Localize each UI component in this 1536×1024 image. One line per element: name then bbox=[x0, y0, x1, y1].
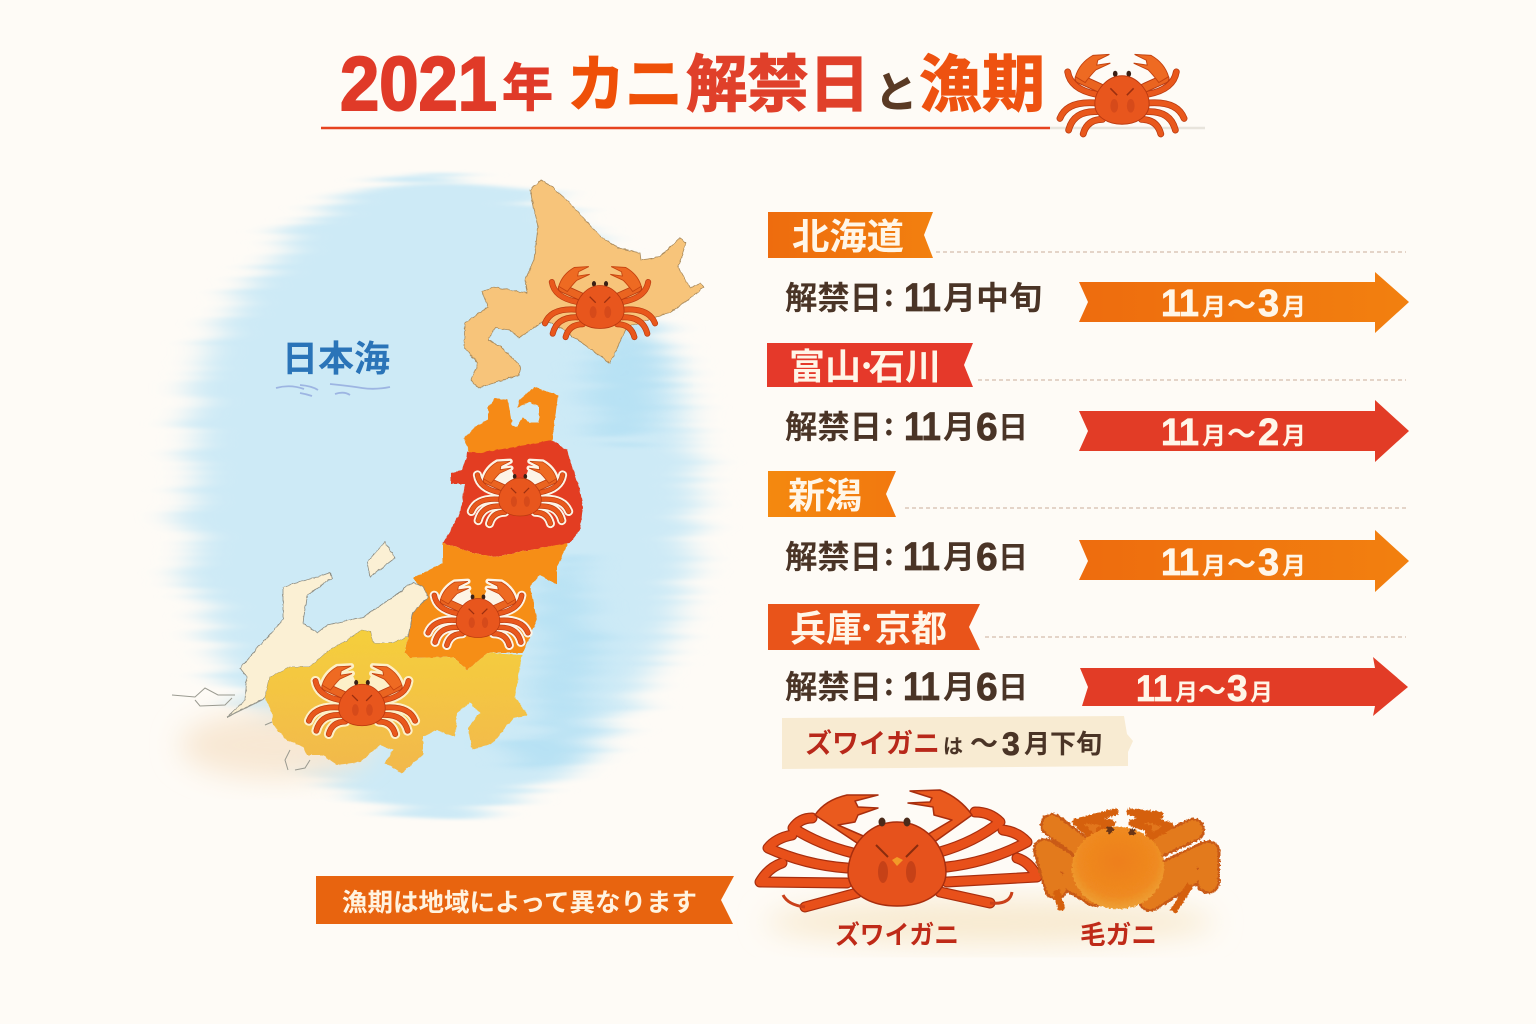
season arrow: 11 bbox=[1136, 668, 1172, 709]
opening date: 解禁日 bbox=[785, 273, 882, 319]
panel: Toyama Ishikawa row bbox=[767, 338, 1409, 462]
title underline bbox=[321, 127, 1205, 129]
opening date: 月 bbox=[943, 662, 975, 708]
opening date: 11 bbox=[903, 535, 940, 579]
heading ribbon: 兵庫 bbox=[790, 600, 862, 652]
season arrow: ～ bbox=[1227, 541, 1256, 583]
region: Kansai outlines bbox=[172, 688, 310, 770]
heading ribbon bbox=[768, 467, 896, 519]
heading ribbon: 富山 bbox=[789, 338, 861, 390]
region: Chubu yellow bbox=[265, 630, 528, 773]
opening date bbox=[785, 530, 1028, 579]
heading ribbon: 北海道 bbox=[792, 208, 904, 260]
season arrow: 11 bbox=[1161, 283, 1199, 325]
title: 解禁日 bbox=[686, 34, 870, 124]
region: Hokkaido bbox=[464, 180, 704, 388]
panel: Hokkaido row bbox=[768, 208, 1409, 333]
panel: Niigata row bbox=[768, 467, 1409, 592]
region: Sado island bbox=[367, 542, 395, 577]
title: と bbox=[875, 59, 917, 120]
opening date: 月中旬 bbox=[943, 273, 1042, 319]
opening date: 11 bbox=[903, 665, 940, 709]
season arrow: ～ bbox=[1198, 669, 1226, 709]
label: snow crab: ズワイガニ bbox=[835, 915, 959, 952]
season arrow bbox=[1079, 400, 1409, 462]
opening date: : bbox=[884, 271, 894, 315]
season arrow: 2 bbox=[1258, 412, 1279, 454]
season arrow: 月 bbox=[1250, 673, 1273, 707]
season arrow: 月 bbox=[1282, 416, 1306, 451]
region: Niigata orange bbox=[405, 543, 568, 670]
season arrow: 月 bbox=[1202, 546, 1226, 581]
heading ribbon: 新潟 bbox=[788, 467, 862, 519]
opening date: 解禁日 bbox=[785, 532, 882, 578]
icon: crab on Tohoku bbox=[471, 461, 569, 524]
sea label: 日本海 bbox=[282, 330, 390, 382]
opening date bbox=[785, 271, 1042, 320]
season arrow: 11 bbox=[1161, 412, 1199, 454]
heading ribbon bbox=[767, 338, 973, 390]
opening date: : bbox=[884, 400, 894, 444]
callout: snow crab note: は bbox=[943, 730, 963, 759]
sea background bbox=[185, 175, 695, 815]
illustration: snow crab bbox=[760, 790, 1037, 907]
season arrow: 月 bbox=[1202, 416, 1226, 451]
title bbox=[340, 34, 1045, 127]
opening date bbox=[785, 660, 1028, 709]
opening date: 日 bbox=[998, 533, 1028, 577]
season arrow: 3 bbox=[1258, 542, 1279, 584]
season arrow: 月 bbox=[1282, 546, 1306, 581]
label: hair crab: 毛ガニ bbox=[1080, 915, 1157, 952]
season arrow: 3 bbox=[1258, 283, 1279, 325]
season arrow: 11 bbox=[1161, 542, 1199, 584]
opening date: : bbox=[884, 530, 894, 574]
callout: snow crab note bbox=[782, 716, 1133, 769]
title: 2021 bbox=[340, 42, 497, 127]
region: Aomori bbox=[464, 387, 558, 455]
opening date: 解禁日 bbox=[785, 662, 882, 708]
season arrow bbox=[1080, 657, 1408, 716]
title: カニ bbox=[567, 34, 683, 124]
opening date: : bbox=[884, 660, 894, 704]
title: 年 bbox=[502, 47, 553, 121]
opening date: 日 bbox=[998, 663, 1028, 707]
panel: map of Japan bbox=[172, 175, 704, 815]
opening date: 月 bbox=[943, 402, 975, 448]
season arrow bbox=[1079, 272, 1409, 333]
heading ribbon: 京都 bbox=[875, 600, 947, 652]
season arrow: 3 bbox=[1227, 668, 1248, 709]
opening date: 6 bbox=[976, 406, 998, 449]
icon: crab on Hokkaido bbox=[545, 267, 655, 337]
icon: title crab bbox=[1060, 54, 1184, 134]
heading ribbon: · bbox=[856, 338, 877, 390]
opening date: 6 bbox=[976, 536, 998, 579]
sand area bbox=[180, 711, 370, 779]
callout: snow crab note: 月下旬 bbox=[1024, 724, 1102, 761]
opening date bbox=[785, 400, 1028, 449]
bottom ribbon: note: 漁期は地域によって異なります bbox=[342, 883, 697, 919]
season arrow: 月 bbox=[1202, 287, 1226, 322]
season arrow: ～ bbox=[1227, 411, 1256, 453]
callout: snow crab note: 3 bbox=[1002, 726, 1020, 762]
title: 漁期 bbox=[919, 34, 1045, 124]
season arrow: ～ bbox=[1227, 282, 1256, 324]
season arrow: 月 bbox=[1282, 287, 1306, 322]
opening date: 解禁日 bbox=[785, 402, 882, 448]
opening date: 6 bbox=[976, 666, 998, 709]
panel: Hyogo Kyoto row bbox=[768, 600, 1408, 769]
icon: crab on Chubu bbox=[309, 666, 415, 734]
bottom ribbon: note bbox=[316, 876, 734, 924]
opening date: 11 bbox=[904, 276, 941, 320]
opening date: 11 bbox=[904, 405, 941, 449]
illustration: hair crab bbox=[1045, 812, 1208, 912]
sand under crabs bbox=[765, 900, 1215, 944]
season arrow: 月 bbox=[1175, 673, 1198, 707]
region: Tohoku red bbox=[443, 440, 583, 557]
callout: snow crab note: ズワイガニ bbox=[805, 722, 940, 761]
callout: snow crab note: ～ bbox=[970, 722, 998, 762]
opening date: 日 bbox=[998, 403, 1028, 447]
heading ribbon bbox=[768, 208, 933, 260]
heading ribbon bbox=[768, 600, 980, 652]
opening date: 月 bbox=[943, 532, 975, 578]
icon: crab on Niigata bbox=[428, 581, 528, 645]
region: Hokuriku cream bbox=[227, 573, 428, 717]
heading ribbon: 石川 bbox=[869, 338, 941, 390]
season arrow bbox=[1079, 530, 1409, 592]
heading ribbon: · bbox=[856, 600, 877, 652]
